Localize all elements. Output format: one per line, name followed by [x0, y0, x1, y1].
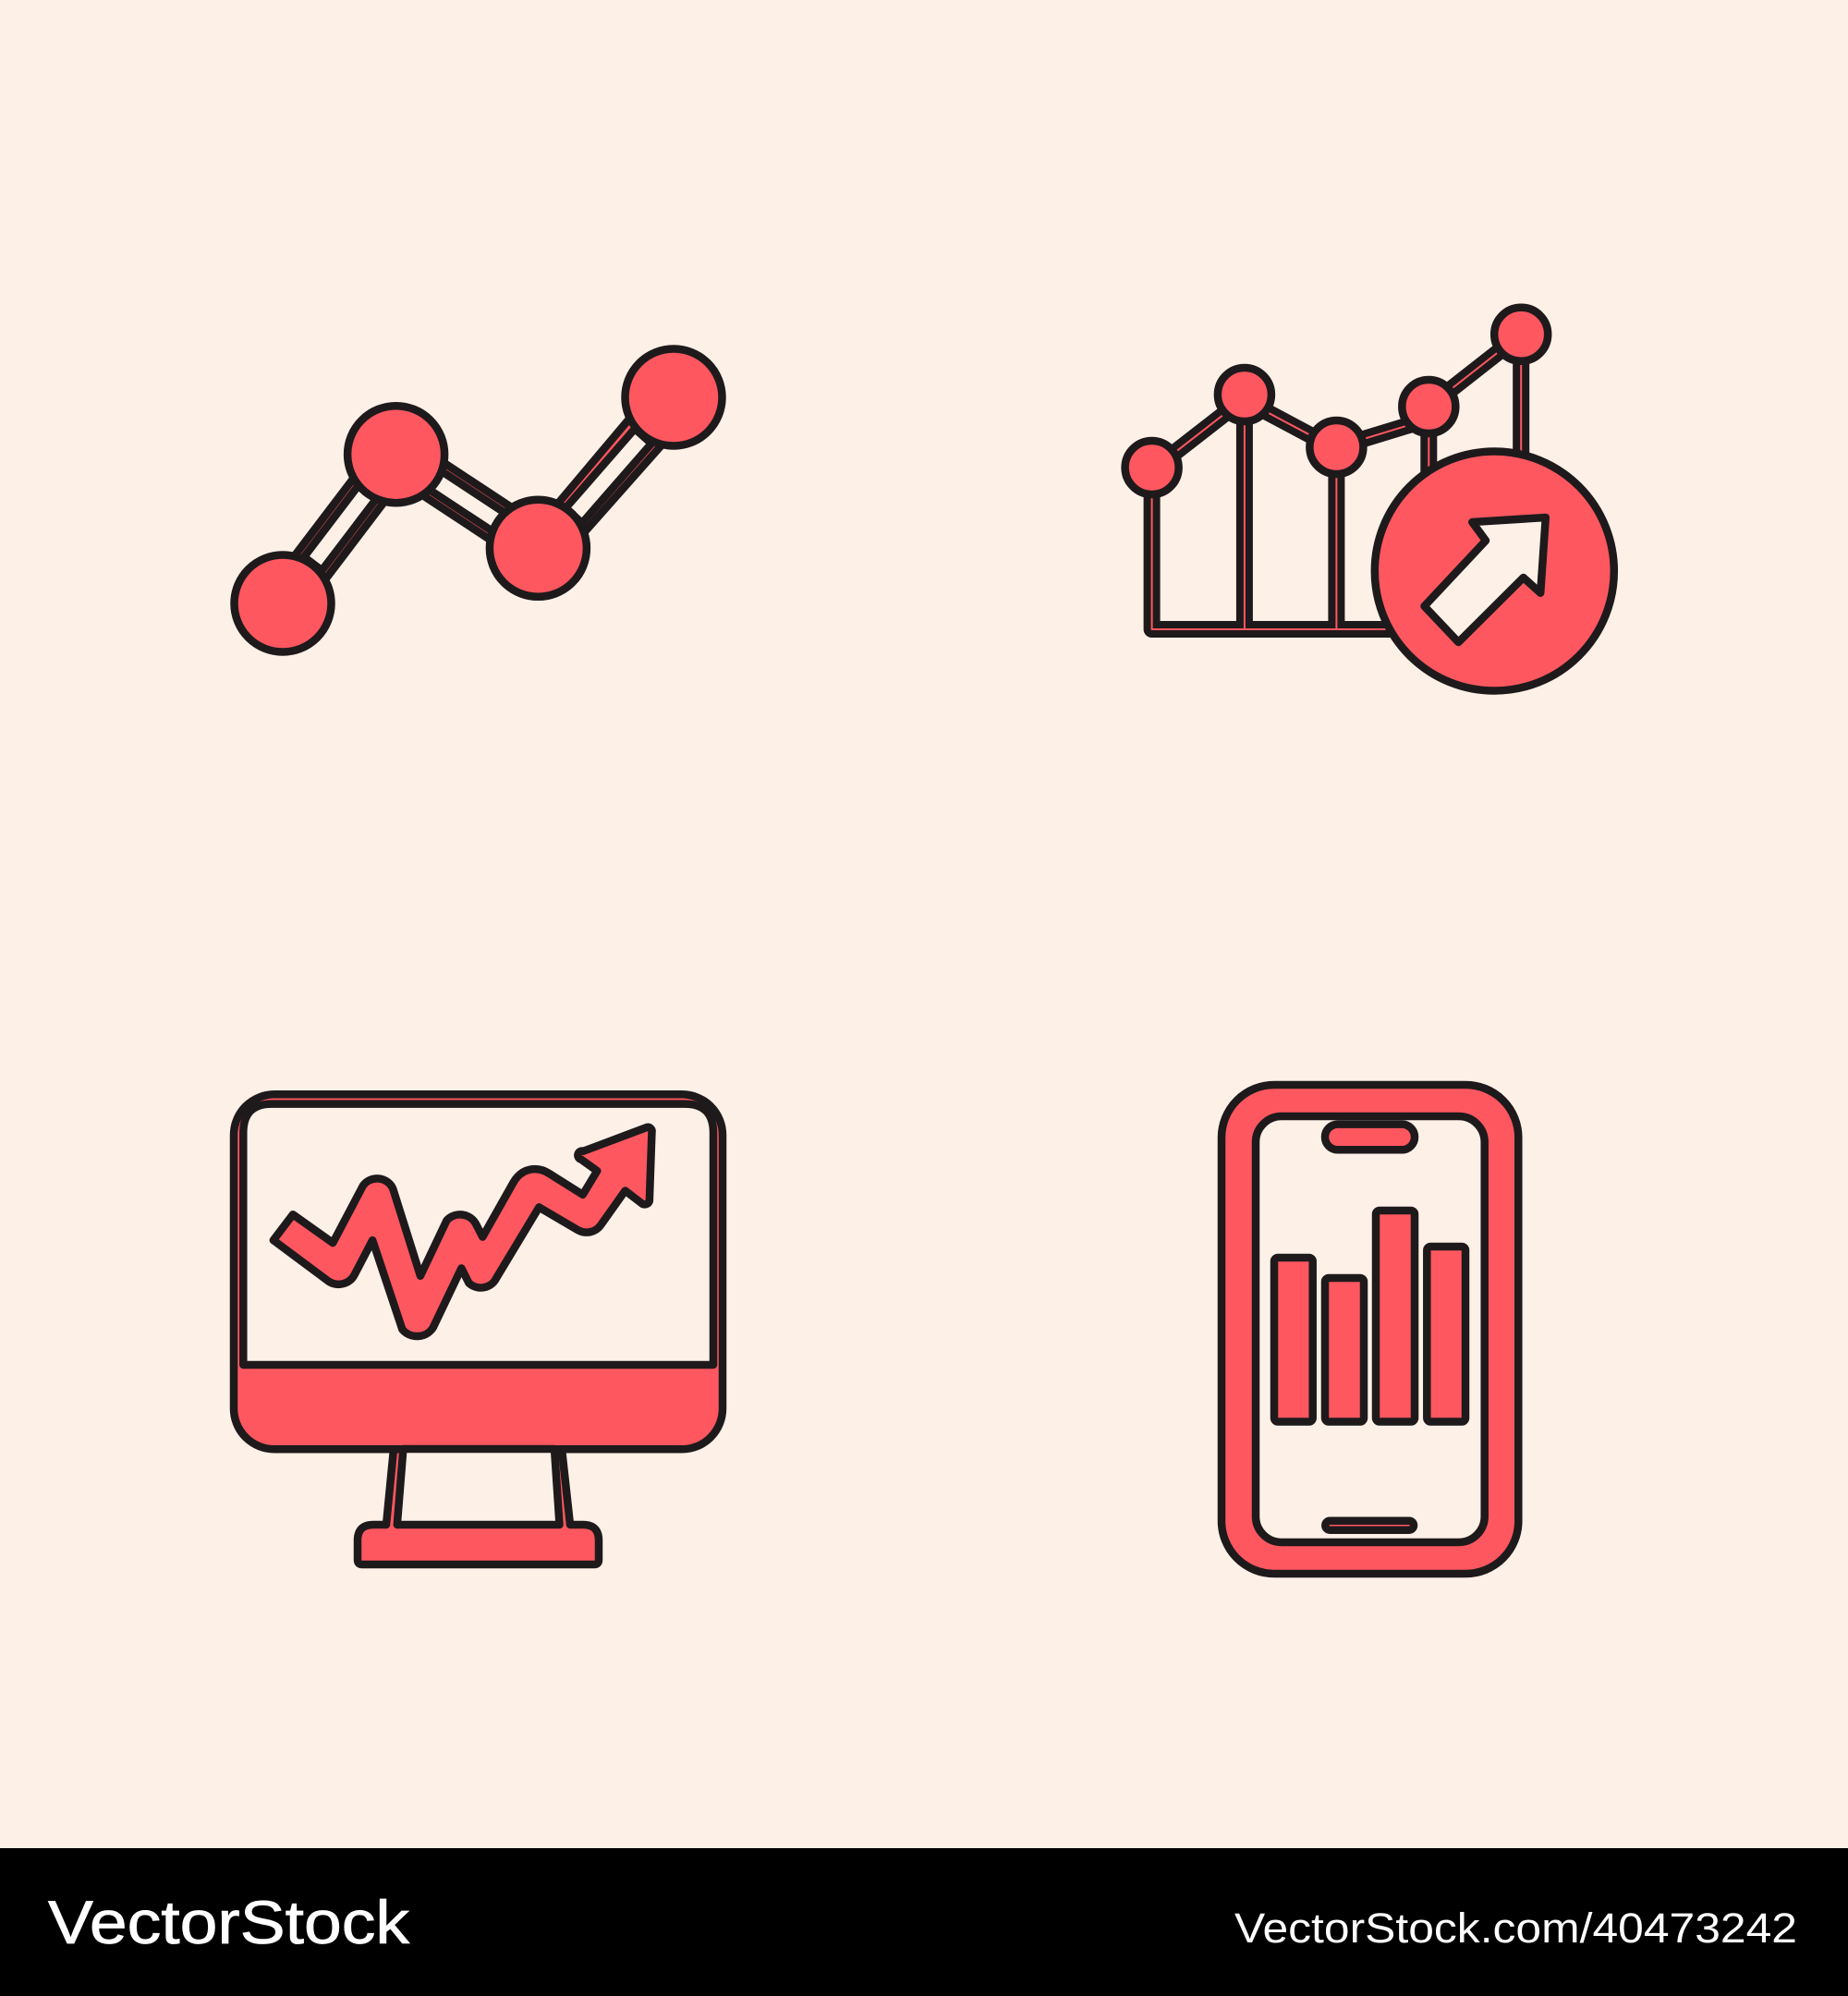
icon: growth chart with arrow badge	[1125, 308, 1614, 691]
footer banner	[0, 1848, 1848, 1996]
icon: line graph with four nodes	[235, 349, 723, 652]
image reference url: VectorStock.com/40473242	[1234, 1905, 1797, 1952]
brand wordmark: VectorStock	[48, 1888, 410, 1956]
icon: monitor with rising trend arrow	[234, 1094, 723, 1564]
icon: smartphone with bar chart	[1222, 1085, 1518, 1574]
